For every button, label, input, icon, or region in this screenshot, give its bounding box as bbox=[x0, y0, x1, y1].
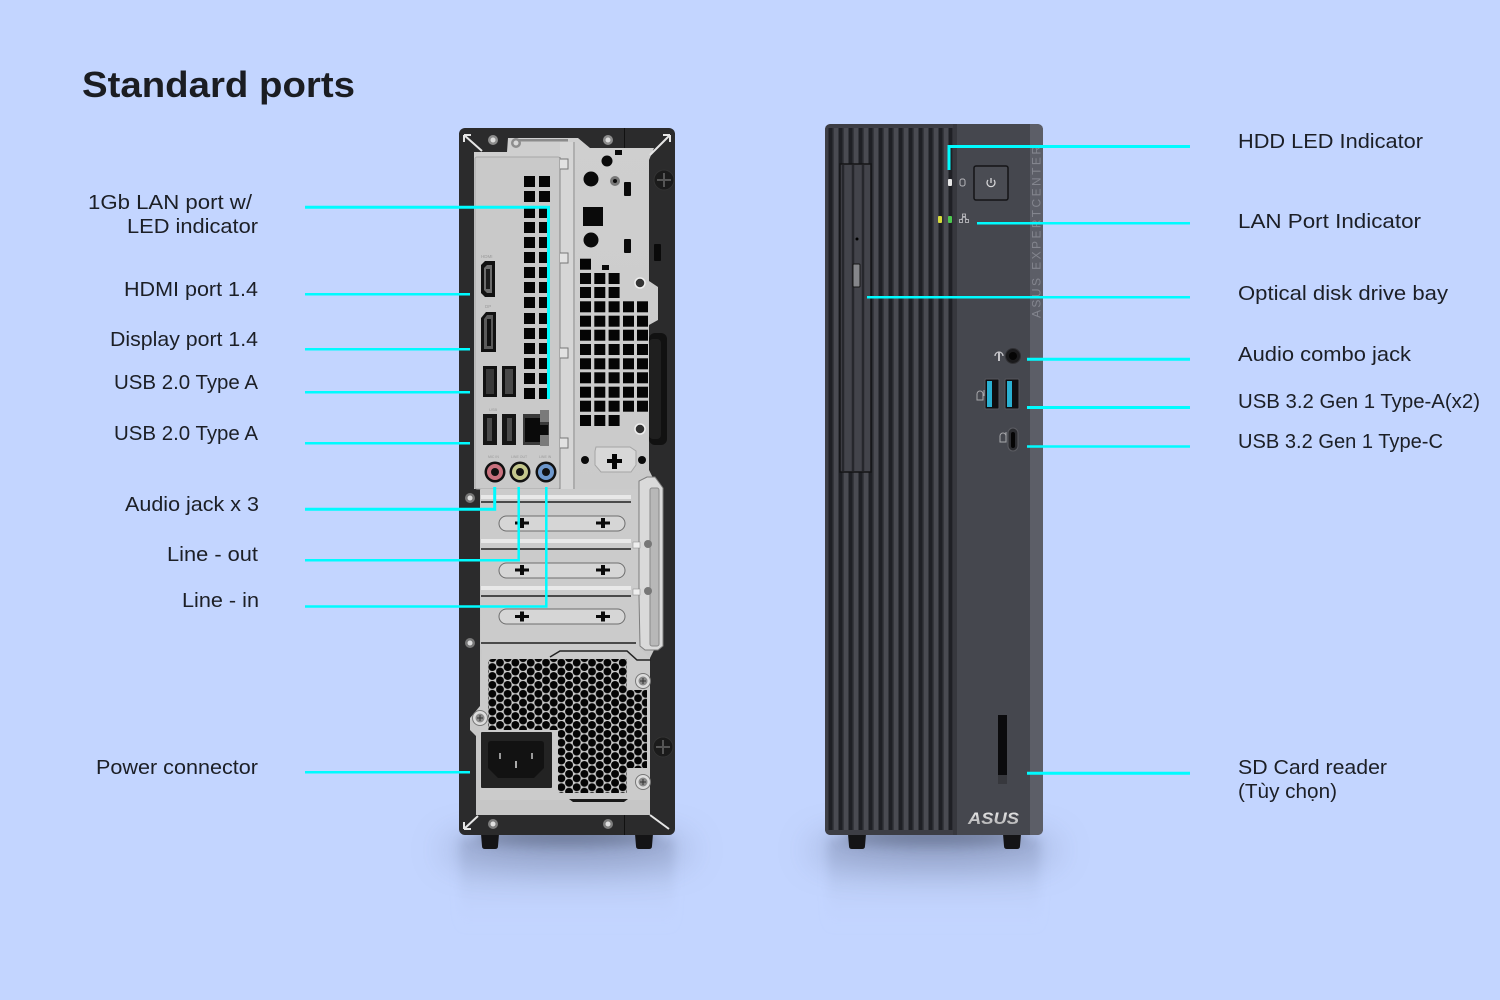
HDMI port bbox=[481, 261, 495, 297]
floor shadow and reflection: front bbox=[809, 827, 1059, 930]
line: LAN indicator bbox=[977, 222, 1190, 225]
status LEDs bbox=[938, 179, 968, 223]
label: Line-out: Line - out bbox=[167, 543, 258, 566]
rear silver chassis plate bbox=[470, 138, 658, 815]
line: 1Gb LAN port bbox=[305, 207, 548, 399]
DisplayPort bbox=[481, 312, 496, 352]
I/O shield panel: LINE IN bbox=[539, 455, 552, 459]
label: USB upper: USB 2.0 Type A bbox=[114, 371, 258, 394]
label: HDD LED: HDD LED Indicator bbox=[1238, 130, 1423, 153]
USB 3.2 Type-A ports bbox=[977, 379, 1019, 409]
I/O shield panel: LINE OUT bbox=[511, 455, 528, 459]
I/O shield panel bbox=[475, 142, 574, 492]
SD card reader bbox=[998, 715, 1007, 784]
ASUS logo: ASUS bbox=[967, 809, 1020, 828]
optical drive bay bbox=[840, 164, 871, 472]
rear feet bbox=[481, 834, 653, 849]
label: LAN indicator: LAN Port Indicator bbox=[1238, 210, 1421, 233]
right labels bbox=[1238, 130, 1480, 803]
front feet bbox=[848, 834, 1021, 849]
line: USB lower bbox=[305, 442, 470, 445]
left labels bbox=[88, 191, 259, 779]
I/O shield panel: HDMI bbox=[481, 254, 492, 259]
ribbed grille bbox=[825, 124, 957, 835]
audio combo jack bbox=[995, 348, 1020, 364]
USB-C port bbox=[1000, 428, 1018, 451]
chassis mounting holes bbox=[583, 150, 661, 270]
line: USB upper bbox=[305, 391, 470, 394]
floor shadow and reflection: rear bbox=[442, 827, 692, 930]
line: Line-out bbox=[305, 487, 519, 560]
label: 1Gb LAN port: 1Gb LAN port w/ bbox=[88, 191, 252, 214]
label: Power connector: Power connector bbox=[96, 756, 258, 779]
thumb screw top bbox=[654, 170, 674, 190]
chassis top details and corner arrows bbox=[464, 128, 670, 835]
label: SD card bbox=[1238, 756, 1387, 803]
label: SD card: SD Card reader bbox=[1238, 756, 1387, 779]
line: Audio combo bbox=[1027, 358, 1190, 361]
I/O shield panel: DP bbox=[485, 304, 491, 309]
power connector bbox=[481, 732, 552, 788]
line: Audio jack bbox=[305, 487, 495, 509]
I/O shield panel: MIC IN bbox=[488, 455, 499, 459]
line: Line-in bbox=[305, 487, 546, 606]
label: Audio combo: Audio combo jack bbox=[1238, 343, 1412, 366]
rear case frame bbox=[459, 128, 675, 835]
power button bbox=[974, 166, 1008, 200]
rear view of desktop tower bbox=[442, 128, 692, 930]
label: Display port: Display port 1.4 bbox=[110, 328, 258, 351]
label: 1Gb LAN port bbox=[88, 191, 258, 238]
audio jacks bbox=[484, 462, 556, 482]
line: HDD LED bbox=[949, 146, 1190, 170]
USB 2.0 ports lower bbox=[483, 414, 516, 445]
PCI retention bracket bbox=[633, 477, 663, 650]
label: Optical drive: Optical disk drive bay bbox=[1238, 282, 1449, 305]
label: 1Gb LAN port: LED indicator bbox=[127, 215, 258, 238]
front case body bbox=[825, 124, 1043, 835]
USB 2.0 ports upper bbox=[483, 366, 516, 397]
side accent strip bbox=[1030, 124, 1043, 835]
expansion slot covers bbox=[481, 489, 640, 649]
label: USB lower: USB 2.0 Type A bbox=[114, 422, 258, 445]
RJ45 LAN port bbox=[523, 410, 549, 446]
left callout lines bbox=[305, 207, 548, 772]
label: HDMI port: HDMI port 1.4 bbox=[124, 278, 258, 301]
right ventilation grid bbox=[580, 259, 648, 426]
title: Standard ports bbox=[82, 64, 355, 105]
label: Audio jack: Audio jack x 3 bbox=[125, 493, 259, 516]
side handle and lower holes bbox=[581, 278, 667, 472]
line: USB Type-A bbox=[1027, 406, 1190, 409]
line: SD card bbox=[1027, 772, 1190, 775]
label: SD card: (Tùy chọn) bbox=[1238, 780, 1337, 803]
label: USB Type-C: USB 3.2 Gen 1 Type-C bbox=[1238, 430, 1443, 453]
line: USB Type-C bbox=[1027, 445, 1190, 448]
I/O ventilation slots bbox=[524, 176, 550, 399]
line: Power connector bbox=[305, 771, 470, 774]
PSU plate and fan vent bbox=[480, 649, 651, 800]
right callout lines bbox=[867, 146, 1190, 773]
front view of desktop tower bbox=[809, 124, 1059, 930]
label: USB Type-A: USB 3.2 Gen 1 Type-A(x2) bbox=[1238, 390, 1480, 413]
I/O shield panel: USB bbox=[489, 407, 498, 412]
line: Display port bbox=[305, 348, 470, 351]
line: HDMI port bbox=[305, 293, 470, 296]
label: Line-in: Line - in bbox=[182, 589, 259, 612]
vertical brand text: ASUS EXPERTCENTER bbox=[1030, 146, 1044, 318]
line: Optical drive bbox=[867, 296, 1190, 299]
thumb screw bottom bbox=[653, 737, 673, 757]
PSU screws bbox=[472, 674, 650, 802]
